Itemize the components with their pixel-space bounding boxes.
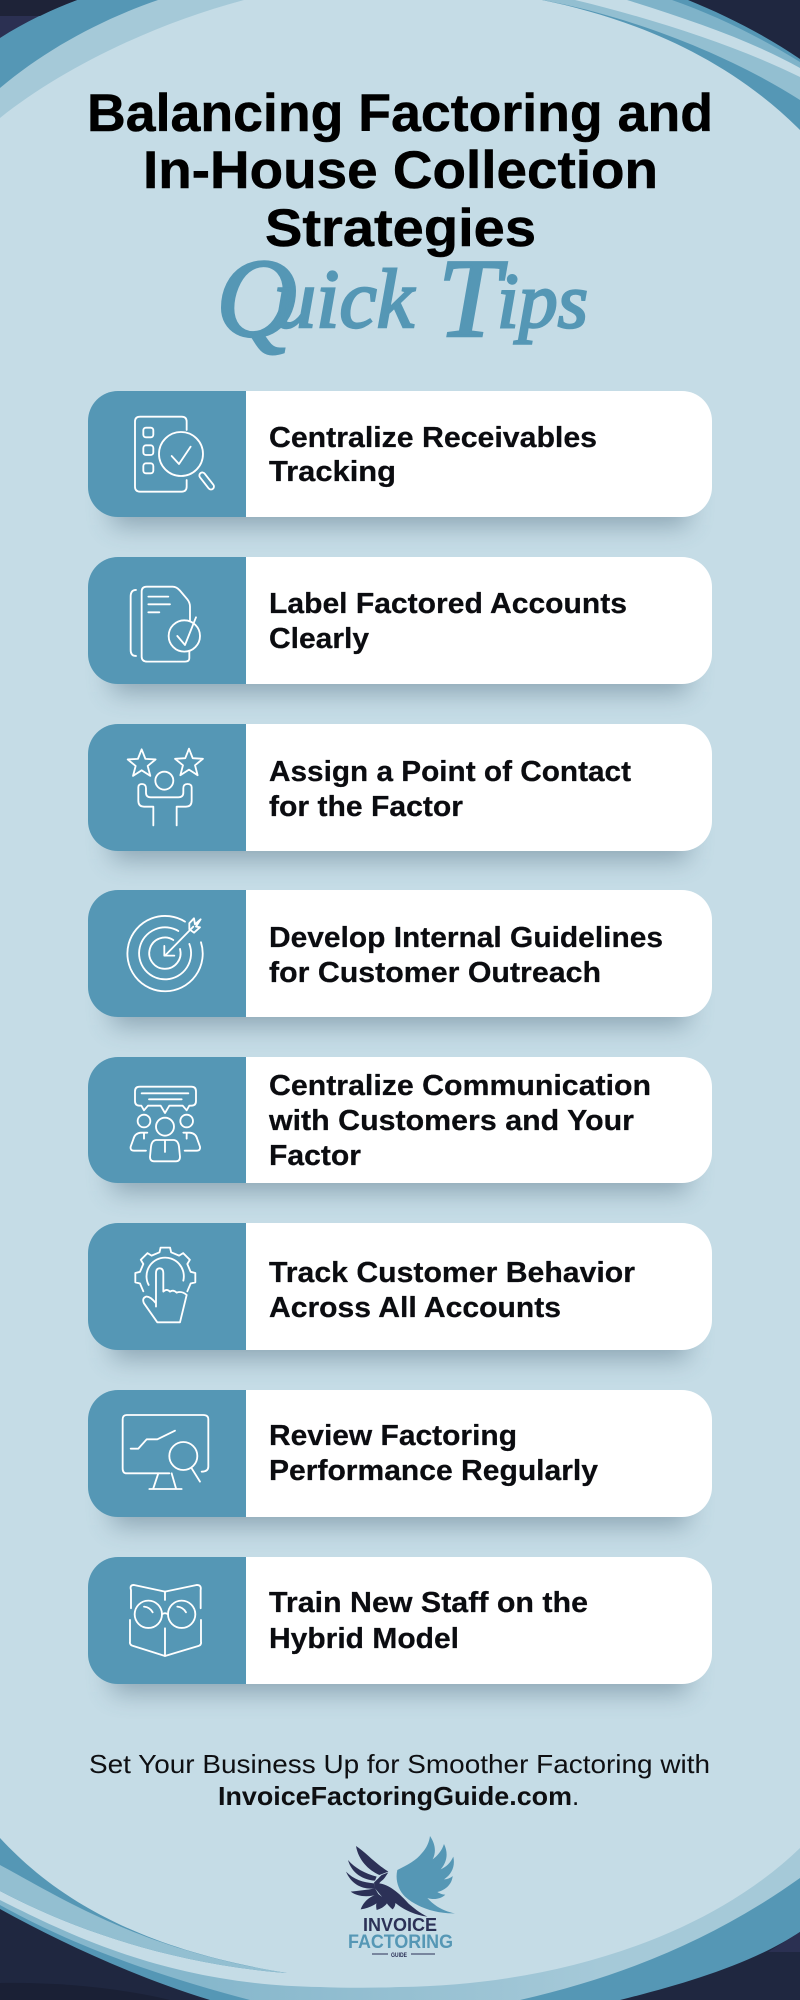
tip text: Centralize Receivables — [269, 422, 597, 454]
card shadow — [112, 1480, 688, 1525]
icon: team with speech bubble — [131, 1087, 200, 1161]
corner swoosh: top left — [0, 0, 244, 118]
subtitle: Quick Tips: T — [438, 237, 507, 361]
tip text: Clearly — [269, 623, 369, 655]
card body — [246, 1223, 712, 1350]
card shadow — [112, 647, 688, 692]
icon panel — [88, 890, 246, 1017]
footer call to action: InvoiceFactoringGuide.com — [218, 1781, 572, 1811]
tip text: for the Factor — [269, 791, 463, 823]
tip text — [269, 756, 631, 823]
tip text — [269, 1587, 588, 1655]
tip text — [269, 588, 627, 655]
tip text — [269, 922, 663, 989]
logo: Invoice Factoring Guide — [346, 1836, 455, 1959]
icon: open book with glasses — [130, 1585, 201, 1656]
card body — [246, 1390, 712, 1517]
tip text — [269, 422, 597, 488]
tip text: Train New Staff on the — [269, 1587, 588, 1619]
card shadow — [112, 1146, 688, 1191]
tip text: Across All Accounts — [269, 1292, 561, 1324]
tip card 4 — [88, 890, 712, 1025]
logo: Invoice Factoring Guide: GUIDE — [391, 1953, 407, 1959]
tip card 7 — [88, 1390, 712, 1525]
title: Balancing Factoring and — [87, 84, 713, 143]
tip text: Factor — [269, 1140, 361, 1172]
corner swoosh: bottom band and right — [0, 1848, 800, 2000]
icon panel — [88, 391, 246, 517]
tip text — [268, 1070, 651, 1172]
card shadow — [112, 1313, 688, 1358]
card body — [246, 1057, 712, 1183]
tip text: Centralize Communication — [269, 1070, 651, 1102]
corner swoosh: bottom left — [0, 1838, 287, 2000]
card body — [246, 724, 712, 851]
icon: document with check — [131, 587, 200, 662]
logo wordmark: INVOICE — [363, 1915, 437, 1935]
tip text: Performance Regularly — [269, 1455, 598, 1487]
tip text: for Customer Outreach — [269, 957, 601, 989]
footer call to action: . — [572, 1781, 579, 1811]
icon: hand pressing gear — [135, 1248, 195, 1322]
tip text: Hybrid Model — [269, 1623, 459, 1655]
card body — [246, 391, 712, 517]
card body — [246, 1557, 712, 1684]
icon: person with two stars — [128, 749, 203, 825]
card shadow — [112, 980, 688, 1025]
tip card 1 — [88, 391, 712, 525]
tip text: Label Factored Accounts — [269, 588, 627, 620]
tip text: Develop Internal Guidelines — [269, 922, 663, 954]
card body — [246, 890, 712, 1017]
title — [87, 84, 713, 258]
card shadow — [112, 814, 688, 859]
icon panel — [88, 1223, 246, 1350]
tip card 6 — [88, 1223, 712, 1358]
icon: target with arrow — [127, 916, 203, 991]
tip text — [269, 1257, 635, 1324]
logo: Invoice Factoring Guide: FACTORING — [348, 1932, 453, 1953]
tip text: with Customers and Your — [268, 1105, 634, 1137]
card body — [246, 557, 712, 684]
icon panel — [88, 557, 246, 684]
tip text: Assign a Point of Contact — [269, 756, 631, 788]
icon: monitor chart with magnifier — [123, 1415, 208, 1489]
tip card 2 — [88, 557, 712, 692]
icon panel — [88, 1057, 246, 1183]
subtitle: Quick Tips: ips — [497, 257, 588, 344]
title: In-House Collection — [143, 141, 658, 200]
subtitle: Quick Tips: Q — [216, 237, 297, 361]
subtitle: Quick Tips: uick — [274, 253, 435, 346]
title: Strategies — [265, 199, 536, 258]
tip text: Review Factoring — [269, 1420, 517, 1452]
tip text: Track Customer Behavior — [269, 1257, 635, 1289]
logo mark: eagle wings — [346, 1836, 455, 1917]
footer call to action: Set Your Business Up for Smoother Factoring with — [89, 1749, 710, 1779]
tip card 8 — [88, 1557, 712, 1692]
corner swoosh: top right — [542, 0, 800, 130]
tip card 3 — [88, 724, 712, 859]
icon panel — [88, 1557, 246, 1684]
tip text — [269, 1420, 598, 1487]
tip card 5 — [88, 1057, 712, 1191]
icon panel — [88, 724, 246, 851]
tip text: Tracking — [269, 456, 396, 488]
footer call to action — [89, 1749, 710, 1811]
card shadow — [112, 480, 688, 525]
icon: checklist with magnifier — [135, 417, 215, 492]
icon panel — [88, 1390, 246, 1517]
card shadow — [112, 1647, 688, 1692]
